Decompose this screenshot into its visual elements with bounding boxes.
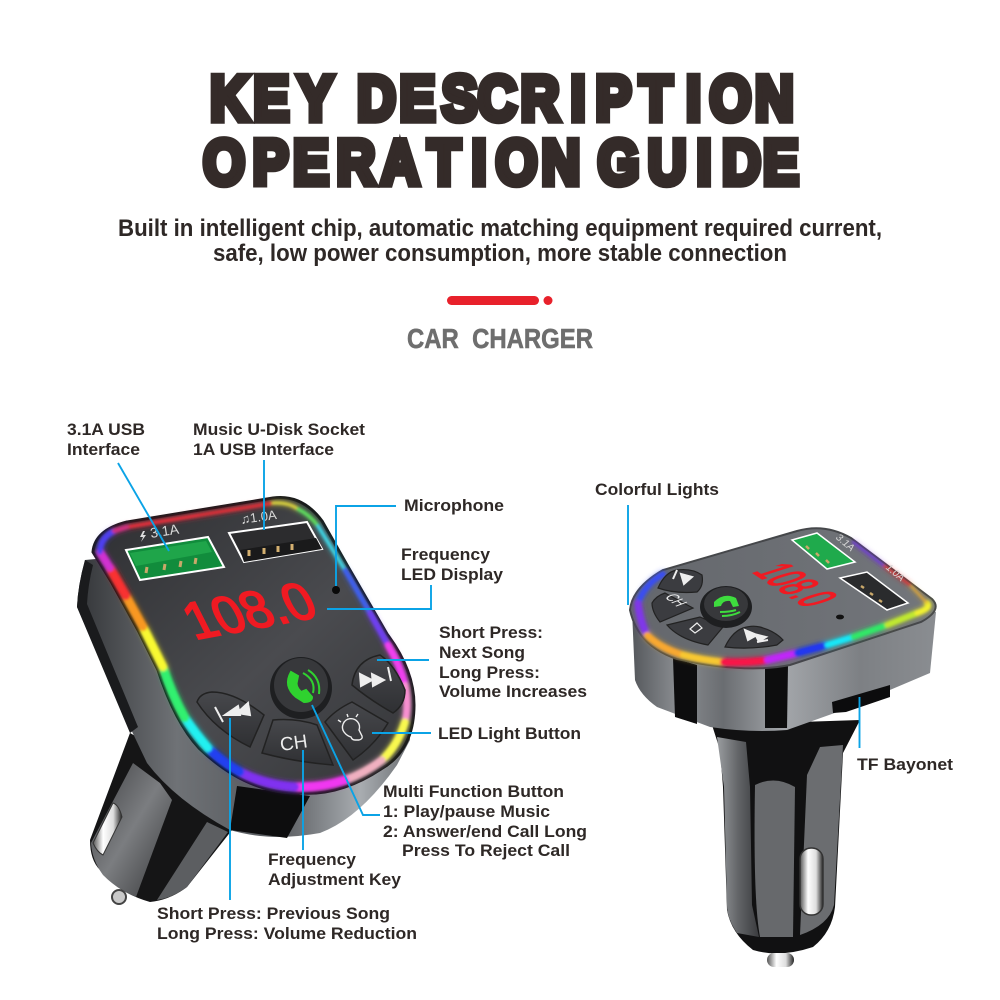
- charger body side: [632, 570, 936, 731]
- dark body stripes: [673, 658, 788, 728]
- title: KEY: [210, 64, 333, 134]
- port label 3.1A: 3.1A: [149, 521, 181, 541]
- port label 1.0A: ♫1.0A: [239, 507, 278, 527]
- subtitle text: safe, low power consumption, more stable connection: [213, 240, 787, 267]
- black usb port: [840, 572, 908, 610]
- label: frequency adjustment key: Frequency: [268, 850, 357, 869]
- label: frequency led display: [401, 545, 504, 584]
- green usb port: [126, 537, 224, 580]
- button: previous: [658, 570, 702, 592]
- title: [203, 64, 799, 198]
- button: led light: [667, 617, 723, 645]
- button: previous: [197, 692, 264, 747]
- label: next song: Short Press:: [439, 623, 543, 642]
- label: multi function button: 1: Play/pause Music: [383, 802, 550, 821]
- charger body side: [77, 540, 410, 837]
- label: previous song: [157, 904, 417, 943]
- top face: [93, 497, 414, 793]
- button: call: [700, 586, 752, 628]
- rainbow light ring: [638, 542, 928, 662]
- section heading: car charger: CAR CHARGER: [407, 323, 593, 354]
- label: frequency led display: Frequency: [401, 545, 491, 564]
- label: previous song: Long Press: Volume Reduction: [157, 924, 417, 943]
- label: next song: Volume Increases: [439, 682, 587, 701]
- label: frequency adjustment key: Adjustment Key: [268, 870, 402, 889]
- black usb port: [229, 522, 322, 562]
- microphone hole: [332, 586, 340, 594]
- label: multi function button: Press To Reject Call: [402, 841, 570, 860]
- led display: 108.0: [741, 558, 851, 612]
- rainbow light ring: [100, 503, 407, 787]
- label: frequency adjustment key: [268, 850, 402, 889]
- red divider: [447, 296, 552, 305]
- button: CH: CH: [660, 592, 690, 609]
- button: CH: [652, 592, 693, 622]
- label: previous song: Short Press: Previous Song: [157, 904, 390, 923]
- label: music u-disk socket: Music U-Disk Socket: [193, 420, 365, 439]
- label: led light button: LED Light Button: [438, 724, 581, 743]
- button: led light: [325, 702, 388, 760]
- plug: [712, 720, 860, 967]
- label: frequency led display: LED Display: [401, 565, 504, 584]
- tf card slot: [832, 685, 890, 713]
- label: next song: Next Song: [439, 643, 525, 662]
- port label: 1.0A: [883, 563, 907, 584]
- plug body: [90, 733, 232, 904]
- label: 3.1A USB interface: [67, 420, 145, 459]
- left charger product image: [77, 497, 414, 904]
- label: next song: [439, 623, 587, 701]
- subtitle text: [118, 215, 882, 267]
- microphone hole: [836, 615, 844, 619]
- label: next song: Long Press:: [439, 663, 540, 682]
- label: 3.1A USB interface: 3.1A USB: [67, 420, 145, 439]
- callout lines: [118, 460, 860, 900]
- green usb port: [792, 533, 855, 569]
- label: music u-disk socket: 1A USB Interface: [193, 440, 334, 459]
- label: microphone: Microphone: [404, 496, 504, 515]
- label: multi function button: 2: Answer/end Call Long: [383, 822, 587, 841]
- label: music u-disk socket: [193, 420, 365, 459]
- label: colorful lights: Colorful Lights: [595, 480, 719, 499]
- subtitle text: Built in intelligent chip, automatic matching equipment required current,: [118, 215, 882, 242]
- title: DESCRIPTION: [357, 64, 794, 134]
- label: multi function button: Multi Function Button: [383, 782, 564, 801]
- button: call: [270, 657, 332, 719]
- right charger product image: [630, 528, 936, 967]
- title: OPERATION: [203, 128, 580, 198]
- title: GUIDE: [598, 128, 799, 198]
- port label: 3.1A: [833, 533, 857, 554]
- label: tf bayonet: TF Bayonet: [857, 755, 953, 774]
- button: CH: [262, 720, 333, 765]
- button: CH: CH: [279, 731, 309, 756]
- top face: [630, 528, 936, 668]
- button: next: [725, 626, 783, 648]
- label: multi function button: [383, 782, 587, 860]
- led display: 108.0: [172, 572, 327, 651]
- label: 3.1A USB interface: Interface: [67, 440, 140, 459]
- button: next: [352, 655, 405, 713]
